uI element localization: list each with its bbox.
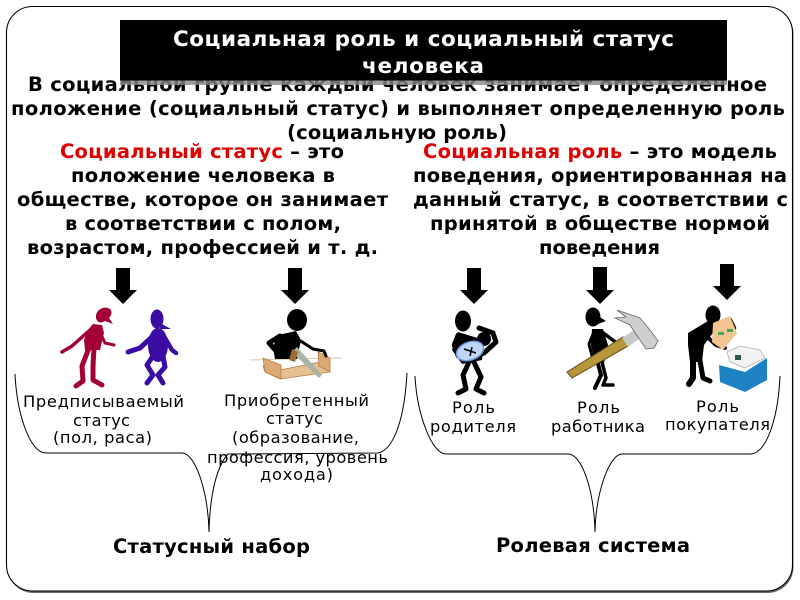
label: buyer role: Роль: [696, 397, 739, 416]
brace: role system: [415, 376, 780, 532]
definition: social role: [413, 140, 788, 259]
label: ascribed status: статус: [73, 411, 130, 430]
icon: parent holding baby: [452, 310, 496, 393]
heading: role system: Ролевая система: [496, 534, 690, 557]
label: buyer role: покупателя: [665, 415, 770, 434]
icon: two figures, ascribed status: [62, 308, 176, 386]
definition: social role: поведения, ориентированная на: [413, 164, 787, 187]
arrow: to worker role: [586, 267, 614, 304]
definition: social status: обществе, которое он занимает: [17, 188, 389, 211]
label: ascribed status: [23, 392, 184, 447]
intro text: положение (социальный статус) и выполняет определенную роль: [11, 97, 785, 120]
intro text: [11, 73, 785, 144]
definition: social status: возрастом, профессией и т. д.: [27, 236, 378, 259]
intro text: В социальной группе каждый человек занимает определенное: [28, 73, 767, 96]
definition: social status: Социальный статус – это: [60, 140, 344, 163]
icon: worker with hammer: [567, 308, 658, 388]
label: achieved status: [207, 391, 388, 484]
label: achieved status: профессия, уровень: [207, 448, 388, 467]
icon: man sawing, achieved status: [250, 309, 342, 379]
heading: status set: Статусный набор: [113, 535, 310, 558]
label: ascribed status: Предписываемый: [23, 392, 184, 411]
label: parent role: [430, 398, 516, 436]
label: achieved status: Приобретенный: [224, 391, 369, 410]
definition: social status: положение человека в: [71, 164, 335, 187]
label: achieved status: статус: [266, 409, 323, 428]
label: achieved status: дохода): [260, 465, 333, 484]
arrow: to parent role: [460, 268, 488, 304]
definition: social status: [17, 140, 389, 259]
label: achieved status: (образование,: [232, 428, 359, 447]
brace: status set: [15, 373, 407, 532]
icon: shopper with box and bin: [688, 306, 767, 392]
definition: social role: принятой в обществе нормой: [430, 212, 770, 235]
label: worker role: [551, 398, 645, 436]
label: worker role: работника: [551, 417, 645, 436]
label: parent role: Роль: [452, 398, 495, 417]
title banner: [120, 20, 727, 85]
definition: social role: поведения: [539, 236, 660, 259]
title banner: человека: [362, 54, 484, 79]
label: ascribed status: (пол, раса): [53, 428, 152, 447]
definition: social role: данный статус, в соответствии с: [413, 188, 788, 211]
arrow: to buyer role: [713, 264, 741, 300]
label: worker role: Роль: [577, 398, 620, 417]
label: parent role: родителя: [430, 417, 516, 436]
intro text: (социальную роль): [287, 121, 507, 144]
definition: social role: Социальная роль – это модель: [423, 140, 777, 163]
definition: social status: в соответствии с полом,: [65, 212, 341, 235]
title banner: Социальная роль и социальный статус: [173, 27, 674, 52]
arrow: to achieved status: [281, 268, 309, 304]
arrow: to ascribed status: [109, 268, 137, 304]
label: buyer role: [665, 397, 770, 434]
